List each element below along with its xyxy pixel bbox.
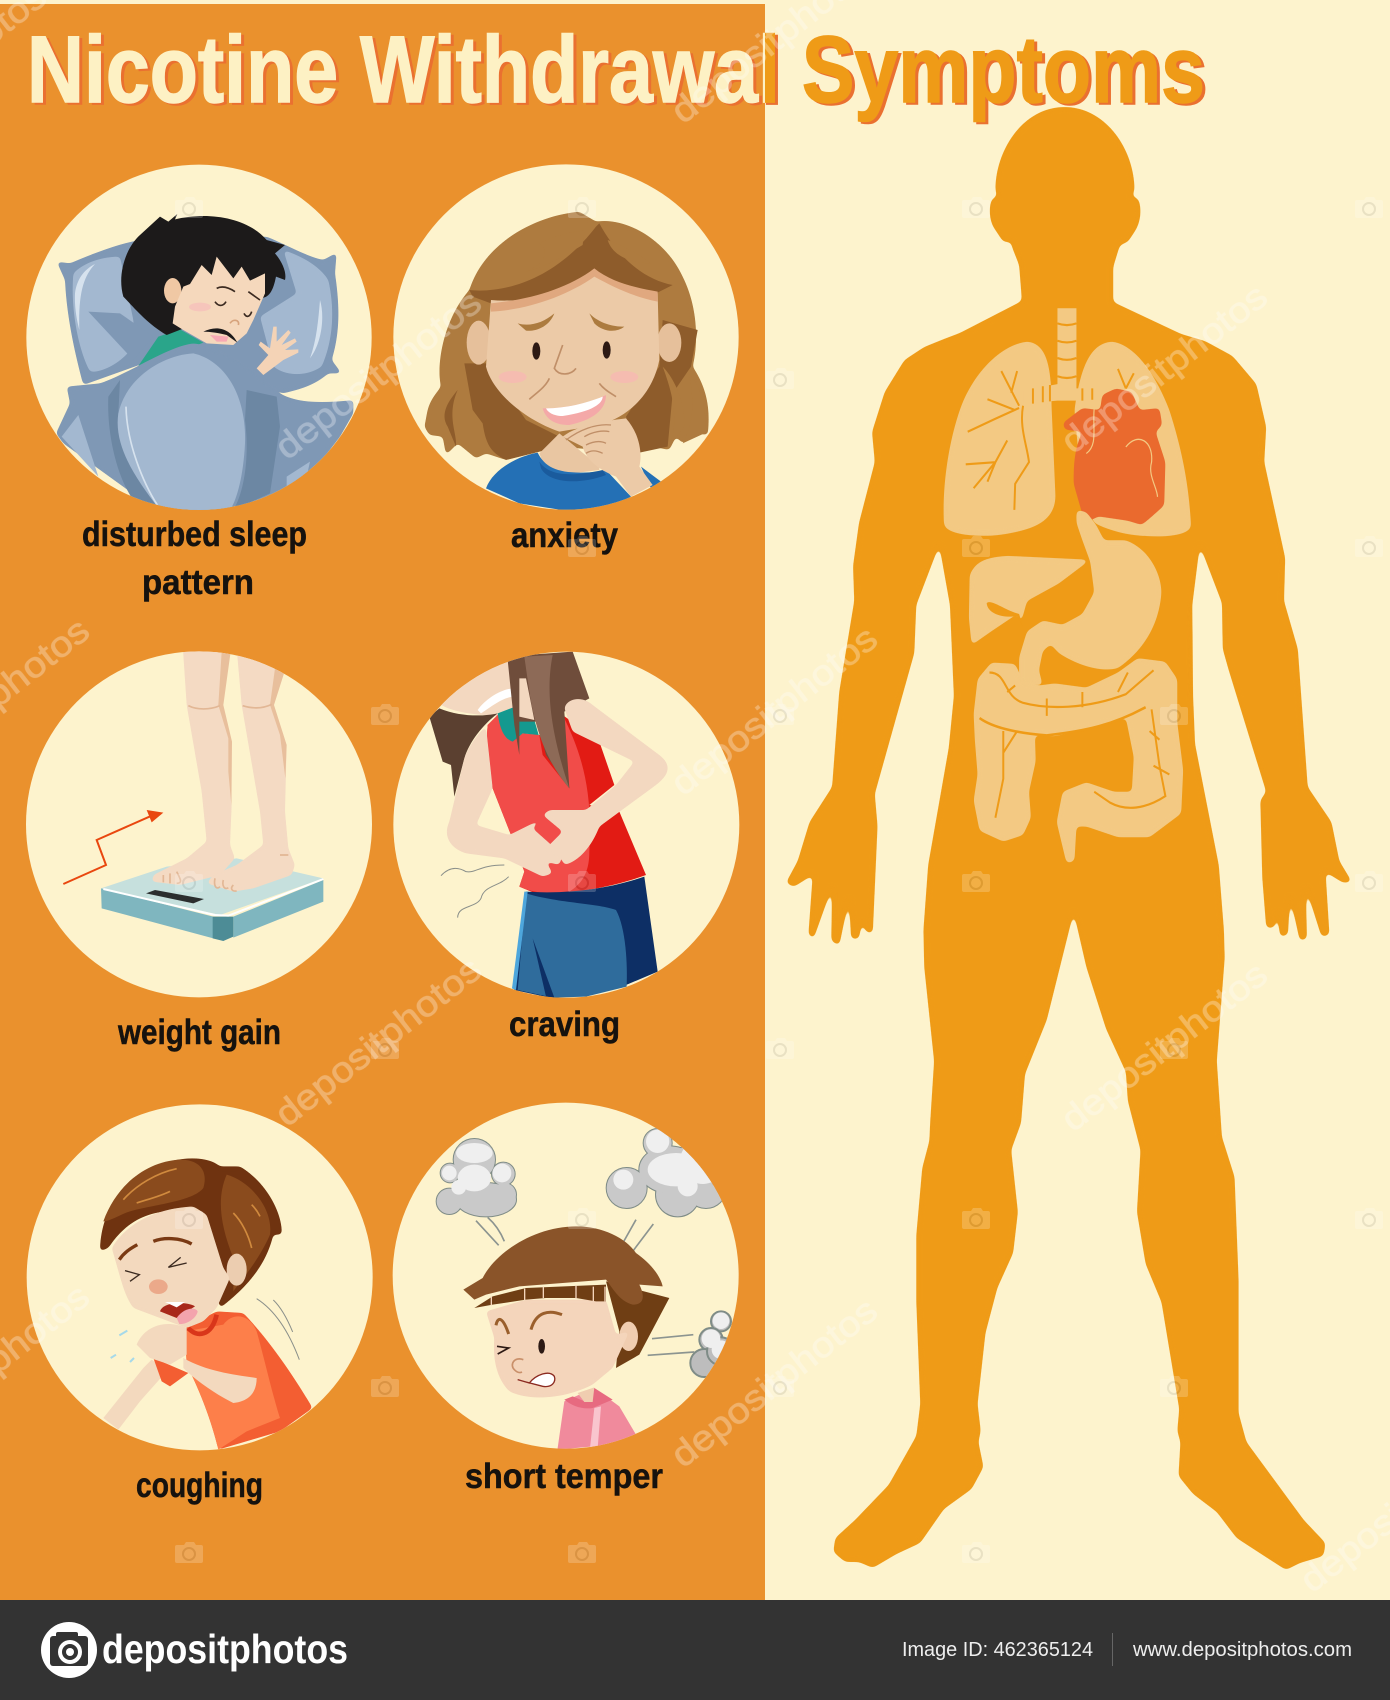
steam lines — [476, 1217, 694, 1355]
stomach and esophagus — [1019, 510, 1161, 686]
eyes and nose — [215, 287, 260, 325]
circle background — [26, 651, 372, 997]
hand — [257, 327, 298, 375]
large intestine — [974, 658, 1183, 863]
angry boy with steam — [437, 1129, 735, 1450]
coughing boy — [100, 1158, 313, 1450]
scale left side — [101, 888, 213, 938]
panel: coughing illustration — [27, 1104, 373, 1450]
sleeping boy — [56, 214, 353, 513]
nose and wrinkles — [529, 345, 616, 399]
eyes — [497, 1346, 509, 1354]
back leg — [152, 645, 235, 885]
neck — [578, 1387, 594, 1402]
organs — [944, 308, 1191, 863]
ears — [467, 321, 491, 365]
right forearm — [183, 1358, 257, 1403]
fist — [137, 1324, 187, 1365]
right lung — [1074, 342, 1191, 536]
top — [487, 715, 646, 895]
gallbladder — [987, 602, 1023, 627]
hair — [121, 214, 285, 335]
label: disturbed sleep pattern: pattern — [142, 563, 254, 602]
website: www.depositphotos.com — [1132, 1639, 1352, 1661]
forearm — [103, 1360, 167, 1430]
eyebrows — [496, 1312, 562, 1334]
mouth — [518, 1373, 555, 1387]
blanket — [56, 343, 353, 513]
scale top — [101, 858, 323, 915]
dark bangs — [474, 1285, 606, 1308]
face — [486, 1300, 629, 1397]
left cloud — [437, 1139, 516, 1216]
panel: short temper illustration — [393, 1103, 739, 1450]
anxious woman — [424, 212, 709, 511]
label: weight gain: weight gain — [117, 1013, 281, 1052]
eyebrows — [518, 313, 624, 331]
hair highlight — [478, 688, 514, 713]
sleeve — [153, 1358, 188, 1386]
panel: weight gain illustration — [26, 645, 372, 997]
trend arrow — [63, 816, 152, 884]
ear — [164, 278, 181, 303]
circle background — [393, 164, 739, 510]
panel: left orange background — [0, 4, 765, 1600]
label: craving: craving — [509, 1005, 620, 1044]
logo wordmark: depositphotos — [102, 1626, 348, 1672]
panel: craving illustration — [393, 652, 739, 998]
nose — [149, 1279, 168, 1294]
left lung — [944, 342, 1055, 536]
panel: right cream background — [765, 0, 1390, 1600]
heart — [1063, 388, 1165, 525]
hair — [100, 1158, 282, 1308]
icon: camera logo — [41, 1622, 97, 1678]
stock photo watermarks: depositphotos — [663, 617, 885, 803]
leg shading — [218, 652, 287, 805]
eyebrows and eyes — [119, 1239, 192, 1260]
back hair — [606, 1281, 669, 1368]
shirt — [558, 1388, 636, 1450]
stock photo watermarks: depositphotos — [267, 948, 489, 1134]
tongue — [177, 1309, 198, 1324]
main hair — [463, 1226, 663, 1305]
left hair — [429, 708, 498, 797]
image id: Image ID: 462365124 — [902, 1639, 1093, 1661]
scale right side — [233, 880, 323, 938]
shirt — [185, 1311, 313, 1450]
hair — [424, 212, 709, 460]
hair shadow — [464, 223, 698, 460]
motion lines — [257, 1299, 299, 1360]
label: short temper: short temper — [465, 1457, 663, 1496]
pillow — [57, 237, 342, 393]
lung vessels — [966, 369, 1134, 510]
collar — [498, 708, 539, 742]
human silhouette — [786, 107, 1352, 1570]
stock photo watermarks: depositphotos — [1053, 953, 1275, 1139]
nose — [512, 1359, 523, 1373]
circle background — [393, 652, 739, 998]
hand — [563, 418, 653, 497]
pain wiggles — [441, 865, 509, 918]
jeans — [514, 877, 658, 998]
cheeks — [499, 371, 527, 383]
shirt — [486, 453, 661, 511]
ear — [619, 1322, 638, 1351]
cough droplets — [111, 1331, 134, 1362]
face — [112, 1206, 230, 1328]
stock photo watermarks: depositphotos — [663, 1289, 885, 1475]
trachea and bronchi — [1023, 308, 1106, 404]
circle background — [27, 1104, 373, 1450]
eyes — [532, 342, 540, 360]
circle background — [393, 1103, 739, 1449]
cheek — [189, 303, 211, 311]
head — [439, 655, 534, 722]
small camera watermarks — [175, 197, 1383, 1563]
right cloud — [607, 1129, 728, 1216]
label: coughing: coughing — [136, 1466, 263, 1505]
label: anxiety: anxiety — [511, 516, 618, 555]
left arm — [447, 727, 563, 877]
stock photo watermarks: depositphotos — [267, 281, 489, 467]
main hair — [508, 652, 589, 788]
neck — [539, 433, 599, 475]
mouth — [203, 328, 237, 343]
footer bar — [0, 1600, 1390, 1700]
stock photo watermarks: depositphotos — [1053, 275, 1275, 461]
legs on a scale — [63, 645, 323, 941]
panel: disturbed sleep pattern illustration — [26, 165, 372, 513]
face — [173, 257, 265, 345]
scale corner — [213, 917, 233, 941]
shirt — [137, 329, 203, 368]
collar — [188, 1315, 217, 1334]
rear cloud — [690, 1311, 735, 1377]
label: disturbed sleep pattern: disturbed sleep — [82, 515, 307, 554]
woman holding her belly — [429, 652, 668, 998]
body silhouette with organs — [786, 107, 1352, 1570]
right arm — [543, 699, 668, 865]
front leg — [207, 648, 295, 892]
panel: anxiety illustration — [393, 164, 739, 511]
face — [486, 270, 659, 432]
liver — [969, 556, 1090, 645]
scale display — [146, 890, 204, 903]
mouth — [160, 1303, 195, 1318]
circle background — [26, 165, 372, 510]
label: disturbed sleep pattern — [82, 515, 307, 602]
mouth — [543, 395, 606, 425]
ear — [227, 1254, 247, 1286]
forehead shadow — [491, 268, 658, 312]
